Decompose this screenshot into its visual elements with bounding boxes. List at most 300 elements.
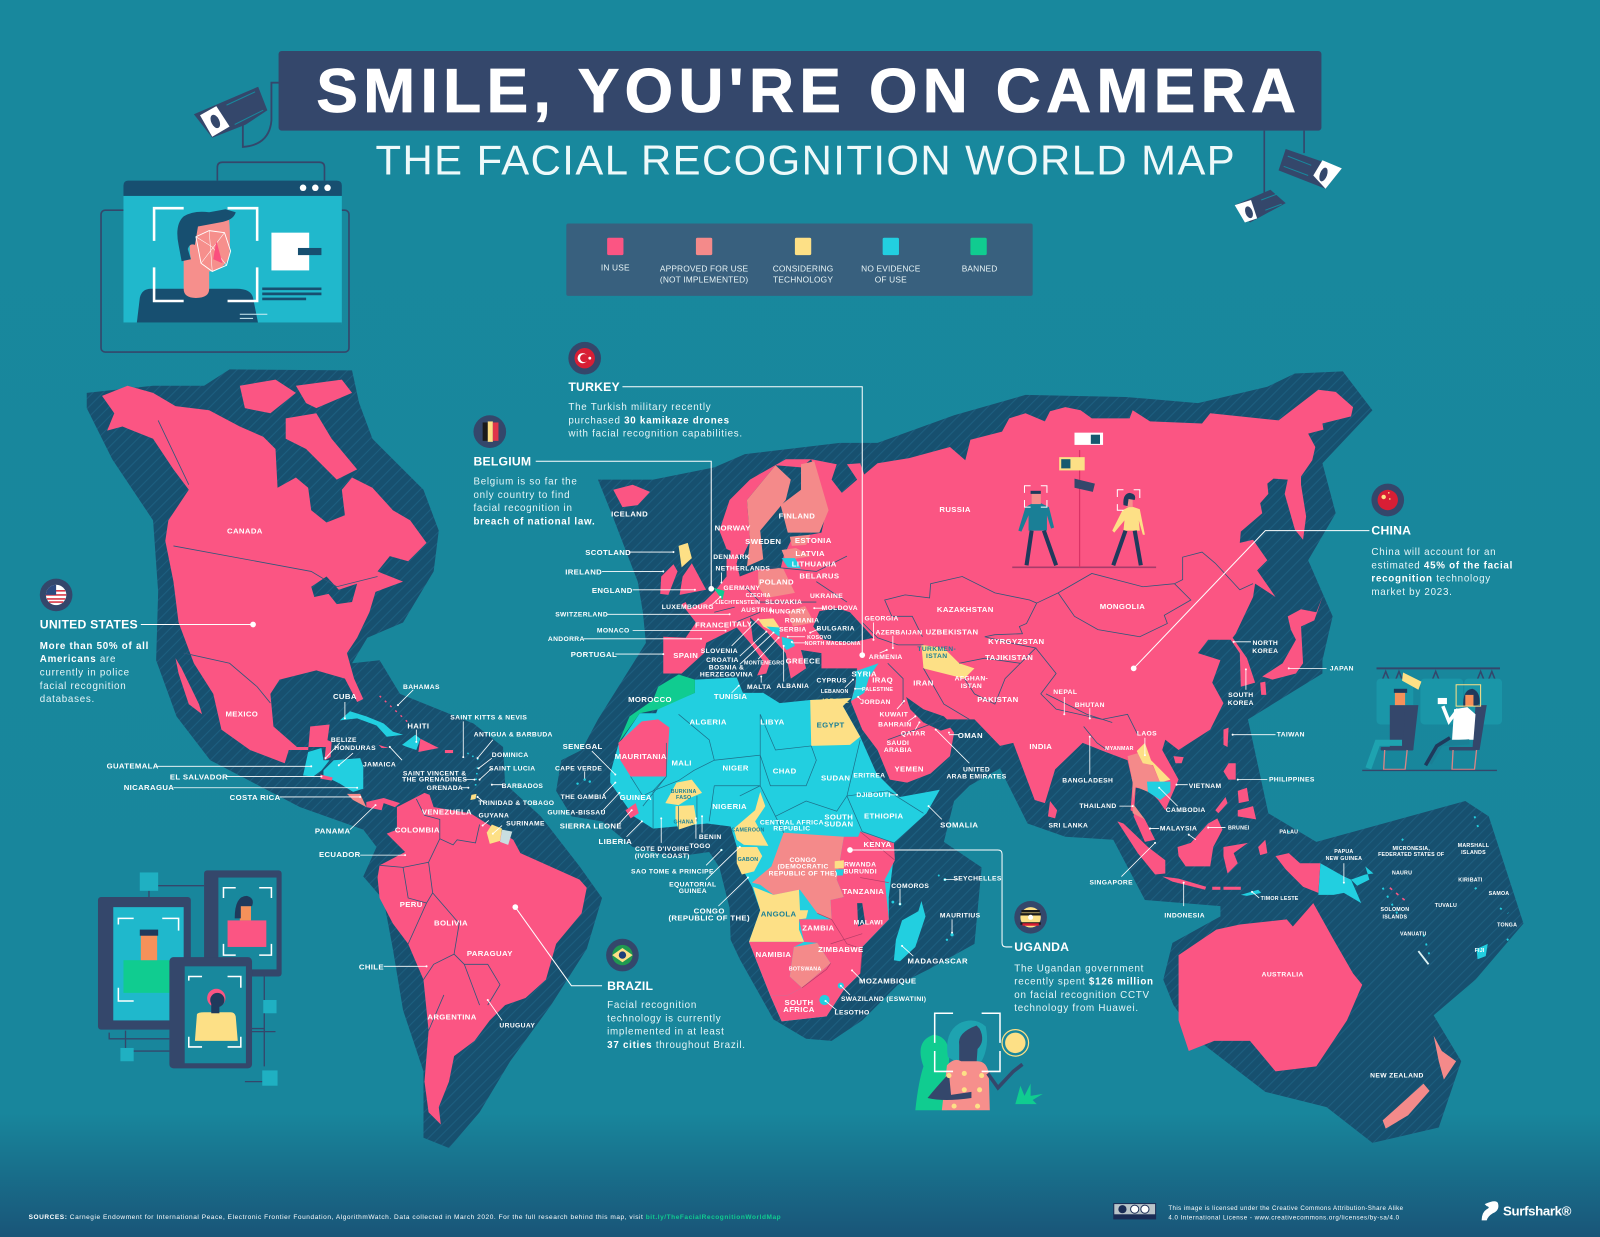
callout: turkey: purchased 30 kamikaze drones	[568, 415, 730, 426]
country labels: americas: CHILE	[359, 962, 384, 971]
callout: uganda: UGANDA	[1014, 940, 1069, 954]
country labels: europe and middle east: AUSTRIA	[741, 607, 773, 614]
country labels: africa: THE GAMBIA	[561, 794, 607, 801]
country labels: asia and oceania: SAMOA	[1489, 891, 1509, 897]
papua and pacific islands	[1241, 816, 1510, 964]
callout: belgium: only country to find	[473, 490, 570, 501]
country labels: asia and oceania: CAMBODIA	[1166, 807, 1206, 814]
world map	[87, 369, 1523, 1148]
country labels: asia and oceania: FEDERATED STATES OF	[1378, 852, 1445, 858]
country labels: africa: (IVORY COAST)	[635, 853, 690, 860]
country labels: asia and oceania: INDIA	[1029, 742, 1052, 751]
country labels: africa: EGYPT	[817, 721, 845, 730]
country labels: asia and oceania: NEW GUINEA	[1326, 856, 1362, 862]
country labels: asia and oceania: MICRONESIA,	[1392, 846, 1430, 852]
legend item: no evidence of use: OF USE	[875, 275, 907, 285]
country labels: europe and middle east: LIECHTENSTEIN	[715, 600, 760, 606]
country labels: asia and oceania: SOLOMON	[1380, 907, 1409, 913]
country labels: asia and oceania: PALAU	[1279, 830, 1298, 836]
country labels: africa: GUINEA	[679, 888, 707, 895]
south america	[378, 793, 587, 1124]
country labels: europe and middle east: ISRAEL	[822, 698, 849, 705]
country labels: asia and oceania: SINGAPORE	[1089, 880, 1133, 887]
country labels: europe and middle east: BULGARIA	[817, 626, 855, 633]
country labels: asia and oceania: TONGA	[1497, 923, 1517, 929]
country labels: asia and oceania: KAZAKHSTAN	[937, 605, 994, 614]
license text: 4.0 International License - www.creativecommons.org/licenses/by-sa/4.0	[1168, 1214, 1400, 1221]
country labels: africa: MALAWI	[854, 919, 883, 926]
icon: turkish flag	[574, 348, 595, 368]
country labels: africa: COMOROS	[891, 883, 929, 890]
country labels: africa: GHANA	[673, 819, 694, 825]
country labels: europe and middle east: MOLDOVA	[822, 605, 858, 612]
country labels: asia and oceania	[917, 505, 1517, 1080]
australia	[1179, 903, 1362, 1071]
country labels: europe and middle east: SWEDEN	[745, 537, 781, 546]
country labels: africa: TOGO	[689, 843, 711, 850]
country labels: europe and middle east: IRAQ	[872, 676, 893, 685]
country labels: africa: GABON	[738, 857, 758, 863]
country labels: africa: CENTRAL AFRICA	[760, 819, 824, 826]
country labels: asia and oceania: TIMOR LESTE	[1261, 896, 1299, 902]
country labels: africa: SEYCHELLES	[953, 876, 1002, 883]
country labels: asia and oceania: PAPUA	[1334, 849, 1353, 855]
country labels: europe and middle east: MONACO	[597, 628, 630, 635]
country labels: europe and middle east: IRELAND	[565, 567, 602, 576]
country labels: americas: BELIZE	[331, 737, 357, 744]
tiny island dots	[576, 778, 1290, 941]
country labels: europe and middle east: FINLAND	[779, 511, 815, 520]
illustration: woman face scan	[915, 1013, 1043, 1110]
country labels: africa: NIGER	[723, 763, 749, 772]
country labels: americas: MEXICO	[225, 709, 258, 718]
country labels: europe and middle east: CZECHIA	[746, 593, 771, 599]
country labels: africa: BURKINA	[671, 789, 697, 795]
country labels: asia and oceania: VIETNAM	[1189, 783, 1222, 790]
country labels: europe and middle east: LATVIA	[795, 549, 825, 558]
country labels: asia and oceania: AFGHAN-	[955, 676, 988, 683]
country labels: europe and middle east: POLAND	[759, 578, 794, 587]
legend item: approved for use: (NOT IMPLEMENTED)	[660, 275, 748, 285]
callout: brazil: 37 cities throughout Brazil.	[607, 1040, 746, 1051]
country labels: americas: COLOMBIA	[395, 826, 440, 835]
country labels: europe and middle east: KOSOVO	[807, 635, 832, 641]
country labels: asia and oceania: NEW ZEALAND	[1370, 1073, 1424, 1080]
icon: security cameras right	[1235, 131, 1342, 222]
country labels: americas: SAINT LUCIA	[489, 765, 535, 772]
country labels: europe and middle east: PALESTINE	[862, 687, 893, 693]
persian gulf	[906, 697, 954, 731]
country labels: asia and oceania: MONGOLIA	[1100, 602, 1145, 611]
country labels: asia and oceania: ISLANDS	[1461, 850, 1486, 856]
legend panel	[566, 223, 1033, 296]
callout: united states: UNITED STATES	[40, 618, 138, 632]
callout: united states	[40, 579, 256, 705]
country labels: asia and oceania: KIRIBATI	[1458, 878, 1483, 884]
country labels: africa: EQUATORIAL	[669, 882, 717, 889]
country labels: europe and middle east: SPAIN	[673, 651, 698, 660]
country labels: europe and middle east: SLOVAKIA	[765, 599, 802, 606]
country labels: asia and oceania: BRUNEI	[1228, 826, 1250, 832]
country labels: americas: COSTA RICA	[230, 793, 281, 802]
country labels: africa: MALI	[671, 758, 692, 767]
country labels: africa: GUINEA-BISSAU	[547, 809, 606, 816]
country labels: europe and middle east: ITALY	[729, 620, 753, 629]
legend item: considering technology	[773, 238, 833, 285]
country labels: americas: PARAGUAY	[467, 949, 513, 958]
country labels: europe and middle east: SYRIA	[852, 670, 877, 679]
callout: uganda: recently spent $126 million	[1014, 977, 1154, 988]
country labels: africa: (REPUBLIC OF THE)	[668, 913, 750, 922]
country labels: asia and oceania: AUSTRALIA	[1262, 972, 1304, 979]
callout: china: estimated 45% of the facial	[1371, 560, 1513, 571]
illustration: browser window with face scan	[101, 162, 349, 352]
country labels: asia and oceania: JAPAN	[1330, 665, 1354, 672]
country labels: asia and oceania: KYRGYZSTAN	[988, 637, 1045, 646]
legend item: in use: IN USE	[601, 262, 630, 272]
callout: turkey	[567, 342, 865, 658]
country labels: europe and middle east: UKRAINE	[810, 593, 843, 600]
country labels: africa: NAMIBIA	[756, 950, 791, 959]
country labels: africa: COTE D'IVOIRE	[635, 846, 690, 853]
country labels: africa: BURUNDI	[843, 868, 877, 875]
country labels: europe and middle east: MONTENEGRO	[744, 660, 785, 666]
country labels: europe and middle east	[548, 509, 1007, 781]
callout: china: CHINA	[1371, 524, 1411, 538]
country labels: africa: GUINEA	[620, 793, 652, 802]
eurasia	[663, 390, 1510, 1129]
phone: man	[98, 897, 191, 1030]
callout: china	[1131, 484, 1513, 671]
scandinavia	[719, 459, 829, 566]
country labels: europe and middle east: SERBIA	[779, 627, 807, 634]
country labels: africa: ERITREA	[853, 773, 885, 780]
callout: belgium: breach of national law.	[473, 516, 595, 527]
country labels: africa: ANGOLA	[761, 909, 796, 918]
country labels: europe and middle east: GERMANY	[723, 585, 760, 592]
country labels: africa: CONGO	[694, 906, 725, 915]
country labels: africa: CHAD	[773, 766, 797, 775]
country labels: americas: NICARAGUA	[124, 783, 174, 792]
country labels: africa: MOZAMBIQUE	[859, 977, 916, 986]
illustration: scanned phones with three people	[98, 870, 282, 1086]
country labels: africa: FASO	[676, 795, 691, 801]
legend item: in use	[601, 238, 630, 272]
country labels: europe and middle east: OMAN	[958, 731, 983, 740]
callout: turkey: with facial recognition capabilities.	[567, 429, 743, 440]
country labels: africa: MOROCCO	[628, 695, 672, 704]
iceland and british isles	[613, 485, 706, 595]
new zealand	[1383, 1036, 1456, 1129]
callout: brazil	[512, 904, 746, 1051]
country labels: europe and middle east: SCOTLAND	[585, 548, 631, 557]
country labels: europe and middle east: CYPRUS	[817, 678, 847, 685]
callout: turkey: The Turkish military recently	[568, 402, 711, 413]
callout: united states: facial recognition	[40, 681, 126, 692]
country labels: asia and oceania: KOREA	[1228, 700, 1254, 707]
callout: china: China will account for an	[1371, 547, 1496, 558]
country labels: americas: DOMINICA	[492, 752, 529, 759]
country labels: asia and oceania: FIJI	[1475, 948, 1485, 954]
country labels: europe and middle east: SLOVENIA	[701, 648, 738, 655]
legend item: banned: BANNED	[962, 263, 997, 273]
country labels: americas: SAINT VINCENT &	[403, 771, 466, 778]
country labels: europe and middle east: ESTONIA	[795, 536, 832, 545]
country labels: americas: THE GRENADINES	[402, 777, 467, 784]
country labels: africa: SOUTH	[785, 998, 813, 1007]
country labels: europe and middle east: HERZEGOVINA	[700, 672, 753, 679]
country labels: europe and middle east: LEBANON	[821, 689, 849, 695]
legend item: considering technology: TECHNOLOGY	[773, 275, 833, 285]
north america	[102, 380, 427, 763]
country labels: asia and oceania: TAJIKISTAN	[985, 653, 1033, 662]
callout: turkey: TURKEY	[568, 380, 620, 394]
callout: belgium: facial recognition in	[473, 503, 573, 514]
callout: united states: databases.	[40, 694, 95, 705]
country labels: africa: SIERRA LEONE	[560, 822, 622, 831]
icon: brazilian flag	[612, 945, 633, 965]
country labels: africa: SOUTH	[824, 812, 853, 821]
country labels: africa: ALGERIA	[689, 717, 727, 726]
country labels: europe and middle east: QATAR	[901, 731, 926, 738]
country labels: europe and middle east: CROATIA	[706, 657, 739, 664]
country labels: asia and oceania: INDONESIA	[1164, 912, 1205, 919]
country labels: asia and oceania: KOREA	[1252, 648, 1278, 655]
callout: china: market by 2023.	[1371, 587, 1453, 598]
country labels: europe and middle east: ROMANIA	[785, 617, 819, 624]
country labels: asia and oceania: ISTAN	[926, 653, 947, 660]
person: woman	[1112, 490, 1145, 565]
country labels: africa: TUNISIA	[714, 692, 747, 701]
callout: brazil: technology is currently	[607, 1013, 721, 1024]
license text: This image is licensed under the Creative Commons Attribution-Share Alike	[1168, 1205, 1404, 1212]
country labels: africa: MAURITIUS	[940, 912, 981, 919]
country labels: americas	[107, 527, 554, 1030]
country labels: africa: ETHIOPIA	[864, 811, 903, 820]
country labels: africa: SAO TOME & PRINCIPE	[631, 868, 714, 875]
legend item: no evidence of use: NO EVIDENCE	[861, 263, 921, 273]
license text	[1168, 1205, 1404, 1221]
country labels: europe and middle east: FRANCE	[695, 621, 729, 630]
country labels: asia and oceania: THAILAND	[1079, 803, 1117, 810]
country labels: asia and oceania: TAIWAN	[1277, 732, 1305, 739]
country labels: europe and middle east: NORTH MACEDONIA	[805, 641, 861, 647]
asian and european borders	[714, 552, 1253, 750]
legend item: approved for use: APPROVED FOR USE	[660, 263, 749, 273]
callout: united states: Americans are	[40, 654, 116, 665]
country labels: asia and oceania: NORTH	[1252, 640, 1278, 647]
country labels: americas: GUATEMALA	[107, 761, 159, 770]
callout: brazil: Facial recognition	[607, 1000, 697, 1011]
country labels: americas: TRINIDAD & TOBAGO	[478, 800, 554, 807]
country labels: africa: BOTSWANA	[789, 966, 821, 972]
country labels: americas: ECUADOR	[319, 850, 361, 859]
country labels: asia and oceania: LAOS	[1137, 731, 1157, 738]
country labels: europe and middle east: PORTUGAL	[571, 650, 617, 659]
phone: woman in yellow	[169, 957, 252, 1068]
callout: china: recognition technology	[1371, 574, 1491, 585]
country labels: asia and oceania: MALAYSIA	[1160, 826, 1197, 833]
country labels: americas: URUGUAY	[499, 1023, 535, 1030]
callout: brazil: BRAZIL	[607, 979, 654, 993]
country labels: americas: HAITI	[407, 722, 429, 731]
country labels: africa: SUDAN	[821, 774, 850, 783]
country labels: europe and middle east: NORWAY	[715, 524, 751, 533]
country labels: africa: DJIBOUTI	[856, 792, 891, 799]
map halo: americas	[87, 369, 602, 1148]
country labels: africa: SUDAN	[824, 820, 853, 829]
country labels: americas: PANAMA	[315, 827, 350, 836]
subtitle: THE FACIAL RECOGNITION WORLD MAP	[376, 136, 1235, 183]
country labels: africa: BENIN	[699, 834, 722, 841]
country labels: asia and oceania: ISLANDS	[1383, 914, 1407, 920]
country labels: asia and oceania: BHUTAN	[1075, 702, 1105, 709]
country labels: americas: ANTIGUA & BARBUDA	[474, 732, 553, 739]
country labels: asia and oceania: TUVALU	[1435, 903, 1457, 909]
country labels: asia and oceania: RUSSIA	[939, 505, 971, 514]
country labels: europe and middle east: GEORGIA	[865, 615, 899, 622]
callout: uganda	[847, 847, 1154, 1014]
south-east asian islands	[1048, 597, 1322, 893]
country labels: europe and middle east: ENGLAND	[592, 586, 633, 595]
country labels: africa: REPUBLIC OF THE)	[769, 871, 837, 878]
country labels: europe and middle east: SWITZERLAND	[555, 611, 608, 618]
africa	[610, 674, 940, 1021]
country labels: africa: SENEGAL	[563, 742, 603, 751]
country labels: europe and middle east: BOSNIA &	[709, 664, 744, 671]
country labels: africa: TANZANIA	[842, 887, 884, 896]
country labels: africa: NIGERIA	[712, 802, 747, 811]
surfshark logo	[1482, 1201, 1572, 1220]
country labels: africa: REPUBLIC	[773, 826, 810, 833]
callout: belgium: BELGIUM	[473, 454, 531, 468]
country labels: americas: JAMAICA	[363, 761, 396, 768]
country labels: europe and middle east: ARAB EMIRATES	[946, 774, 1007, 781]
country labels: europe and middle east: UNITED	[963, 766, 990, 773]
country labels: europe and middle east: MALTA	[747, 684, 771, 691]
country labels: europe and middle east: ARMENIA	[869, 654, 903, 661]
country labels: africa: (DEMOCRATIC	[777, 863, 829, 870]
country labels: europe and middle east: ICELAND	[611, 509, 648, 518]
country labels: africa: ZAMBIA	[802, 924, 835, 933]
country labels: americas: PERU	[400, 900, 423, 909]
country labels: europe and middle east: HUNGARY	[770, 608, 806, 615]
country labels: americas: CUBA	[333, 692, 357, 701]
country labels: americas: EL SALVADOR	[170, 773, 228, 782]
black sea	[813, 608, 873, 643]
icon: chinese flag	[1378, 490, 1398, 510]
surfshark logo: Surfshark®	[1503, 1203, 1572, 1218]
country labels: americas: VENEZUELA	[422, 807, 472, 816]
country labels: africa	[547, 692, 1002, 1016]
country labels: americas: GRENADA	[427, 785, 463, 792]
country labels: africa: CAPE VERDE	[555, 765, 602, 772]
country labels: europe and middle east: LUXEMBOURG	[662, 604, 714, 611]
country labels: europe and middle east: DENMARK	[713, 554, 750, 561]
country labels: africa: SOMALIA	[940, 821, 978, 830]
country labels: europe and middle east: KUWAIT	[880, 711, 909, 718]
country labels: americas: BARBADOS	[502, 783, 543, 790]
callout: belgium: Belgium is so far the	[473, 477, 578, 488]
callout: belgium	[473, 415, 714, 592]
callout: united states: More than 50% of all	[40, 641, 149, 652]
country labels: africa: MADAGASCAR	[908, 956, 968, 965]
title banner: SMILE, YOU'RE ON CAMERA	[316, 57, 1296, 126]
country labels: americas: ARGENTINA	[427, 1012, 477, 1021]
country labels: europe and middle east: ANDORRA	[548, 636, 585, 643]
callout: united states: currently in police	[40, 668, 130, 679]
country labels: americas: SURINAME	[506, 821, 545, 828]
country labels: europe and middle east: SAUDI	[887, 740, 909, 747]
country labels: americas: GUYANA	[479, 812, 509, 819]
leader lines	[157, 552, 1344, 1020]
country labels: asia and oceania: PHILIPPINES	[1269, 777, 1315, 784]
country labels: europe and middle east: YEMEN	[895, 764, 924, 773]
country labels: asia and oceania: VANUATU	[1400, 932, 1427, 938]
country labels: asia and oceania: SOUTH	[1228, 692, 1253, 699]
country labels: africa: KENYA	[863, 840, 892, 849]
icon: ugandan flag	[1020, 907, 1041, 928]
country labels: africa: MAURITANIA	[615, 752, 667, 761]
callout: brazil: implemented in at least	[607, 1027, 725, 1038]
icon: us flag	[46, 585, 66, 605]
country labels: asia and oceania: ISTAN	[961, 683, 982, 690]
phone: woman in pink	[204, 870, 282, 977]
country labels: africa: CAMEROON	[731, 828, 765, 834]
country labels: europe and middle east: ALBANIA	[776, 683, 809, 690]
country labels: americas: CANADA	[227, 527, 263, 536]
country labels: europe and middle east: LITHUANIA	[792, 559, 837, 568]
country labels: africa: LIBYA	[760, 717, 785, 726]
icon: creative commons badge	[1113, 1203, 1156, 1219]
legend item: considering technology: CONSIDERING	[773, 263, 833, 273]
callout: uganda: technology from Huawei.	[1014, 1003, 1139, 1014]
country labels: americas: BAHAMAS	[403, 684, 440, 691]
european country fills	[713, 535, 1170, 819]
country labels: asia and oceania: PAKISTAN	[977, 695, 1019, 704]
country labels: africa: LIBERIA	[599, 837, 632, 846]
country labels: americas: SAINT KITTS & NEVIS	[450, 714, 527, 721]
country labels: africa: SWAZILAND (ESWATINI)	[841, 996, 926, 1003]
country labels: europe and middle east: IRAN	[913, 679, 934, 688]
map halo: eurasia, africa, oceania	[556, 371, 1523, 1143]
central america and caribbean	[303, 696, 480, 810]
country labels: asia and oceania: SRI LANKA	[1048, 823, 1088, 830]
illustration: street surveillance pole with two people	[1012, 433, 1156, 567]
callout: uganda: on facial recognition CCTV	[1014, 990, 1150, 1001]
country labels: asia and oceania: NAURU	[1392, 870, 1412, 876]
country labels: europe and middle east: NETHERLANDS	[716, 565, 770, 572]
legend item: no evidence of use	[861, 238, 921, 285]
country labels: europe and middle east: BELARUS	[799, 572, 839, 581]
illustration: subway passengers	[1362, 668, 1502, 770]
icon: security camera left	[194, 83, 279, 147]
country labels: europe and middle east: AZERBAIJAN	[876, 630, 922, 637]
legend item: approved for use	[660, 238, 749, 285]
country labels: americas: BOLIVIA	[434, 919, 468, 928]
footer sources: SOURCES: Carnegie Endowment for International Peace, Electronic Frontier Foundation, AlgorithmWatch. Data collected in March 2020. For the full research behind this map, visit bit.ly/TheFacialRecognitionWorldMap	[29, 1214, 781, 1221]
country labels: asia and oceania: MYANMAR	[1105, 746, 1134, 752]
country labels: europe and middle east: BAHRAIN	[878, 722, 912, 729]
country labels: europe and middle east: ARABIA	[884, 747, 912, 754]
icon: belgian flag	[483, 421, 498, 442]
country labels: asia and oceania: MARSHALL	[1458, 843, 1490, 849]
country labels: africa: RWANDA	[844, 861, 876, 868]
country labels: africa: AFRICA	[783, 1005, 815, 1014]
country labels: europe and middle east: JORDAN	[860, 699, 891, 706]
country labels: asia and oceania: UZBEKISTAN	[926, 628, 979, 637]
country labels: asia and oceania: BANGLADESH	[1062, 778, 1113, 785]
